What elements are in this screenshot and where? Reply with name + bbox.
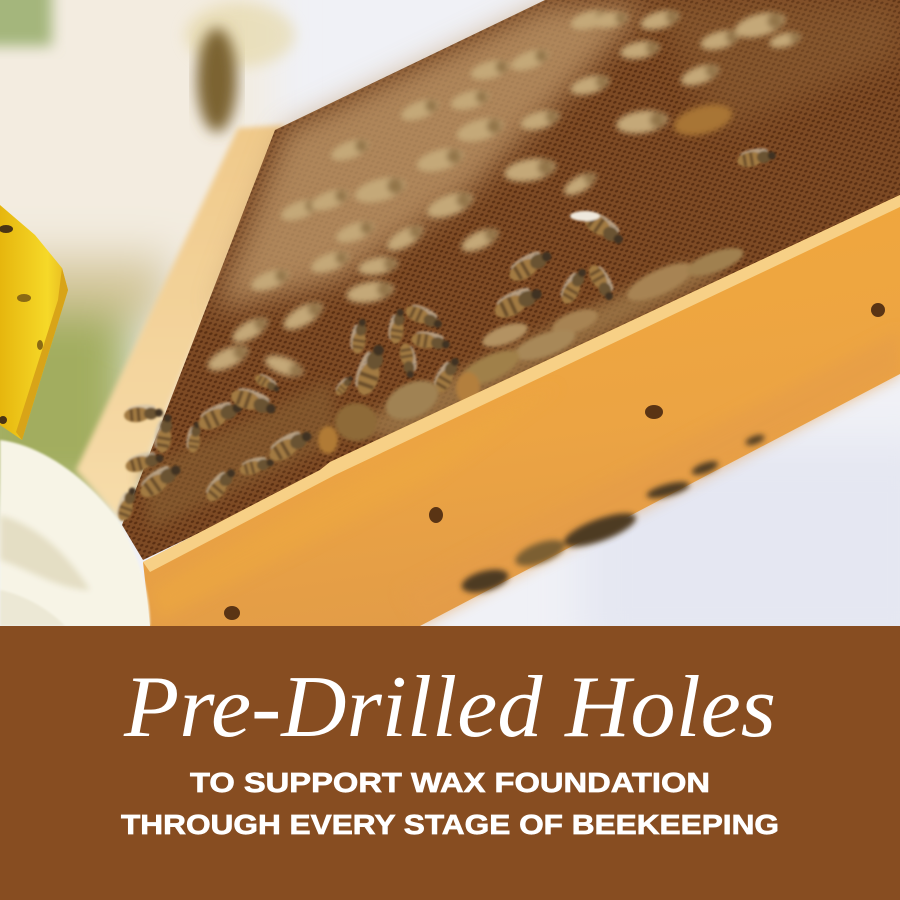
subheading line 1: TO SUPPORT WAX FOUNDATION [190, 767, 710, 798]
drilled holes [224, 303, 885, 620]
bees beneath the frame [459, 433, 766, 597]
frame left rail [76, 125, 285, 520]
subheading line 2: THROUGH EVERY STAGE OF BEEKEEPING [121, 809, 779, 840]
out-of-focus bees, upper comb [204, 7, 802, 381]
gloved hand [0, 440, 150, 626]
photo: beekeeper holding a honeycomb frame [0, 0, 900, 660]
blurred bees near the front rail [318, 242, 747, 454]
script heading: Pre-Drilled Holes [123, 659, 776, 756]
yellow hive tool [0, 205, 68, 440]
in-focus bees, lower comb [113, 145, 777, 523]
wax comb surface [122, 0, 900, 560]
brown caption band [0, 626, 900, 900]
front rail of wooden frame [143, 195, 900, 626]
blurred background [0, 0, 900, 660]
